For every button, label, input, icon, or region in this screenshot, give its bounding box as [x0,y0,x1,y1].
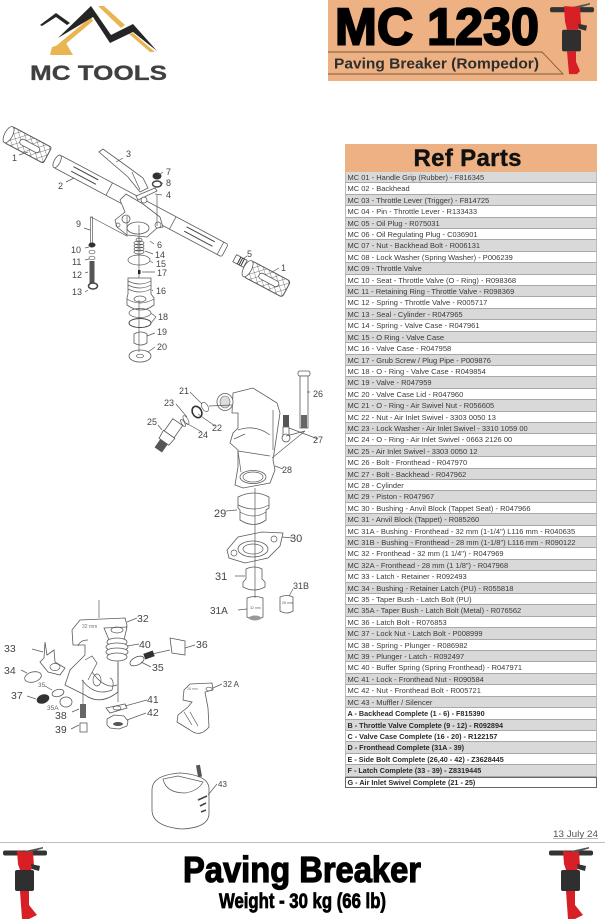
panel: ref parts table: G - Air Inlet Swivel Complete (21 - 25) [348,778,475,787]
callout numbers: 30 [290,533,302,545]
panel: ref parts table: B - Throttle Valve Complete (9 - 12) - R092894 [348,720,503,730]
part: handle tube [51,154,228,257]
part: muffler 43 [152,765,209,829]
panel: ref parts table: MC 17 - Grub Screw / Plug Pipe - P009876 [348,356,491,364]
callout numbers: 21 [179,386,189,396]
callout numbers: 7 [166,167,171,177]
part: nut 7 [152,172,162,180]
part: lock 41 [106,704,127,713]
callout numbers: 36 [196,639,208,651]
panel: ref parts table: MC 18 - O - Ring - Valve Case - R049854 [348,367,486,376]
callout numbers: 12 [72,270,82,280]
panel: ref parts table: MC 26 - Bolt - Fronthead - R047970 [348,458,467,467]
panel: ref parts table: MC 03 - Throttle Lever (Trigger) - F814725 [348,196,489,205]
callout numbers: 2 [58,181,63,191]
part: fronthead 32A: 28 mm [187,687,198,691]
panel: ref parts table: MC 08 - Lock Washer (Spring Washer) - P006239 [348,253,513,262]
part: valve case lid 20 [129,350,151,362]
callout numbers: 3 [126,149,131,159]
panel: ref parts table: MC 07 - Nut - Backhead Bolt - R006131 [348,241,480,250]
callout numbers: 5 [247,249,252,259]
panel: ref parts table: MC 31A - Bushing - Fronthead - 32 mm (1-1/4") L116 mm - R040635 [348,527,575,536]
part: o rings 18 [129,308,151,318]
callout numbers: 23 [164,398,174,408]
panel: ref parts table: MC 15 - O Ring - Valve Case [348,333,444,342]
part: latch bolt 36 [143,638,185,660]
panel: ref parts table: MC 22 - Nut - Air Inlet Swivel - 3303 0050 13 [348,413,496,422]
panel: ref parts table: MC 02 - Backhead [348,184,410,193]
callout numbers: 32 [137,613,149,625]
panel: ref parts table: MC 43 - Muffler / Silencer [348,698,432,707]
callout numbers: 13 [72,287,82,297]
panel: ref parts table: MC 13 - Seal - Cylinder - R047965 [348,310,463,319]
panel: model title banner [328,0,597,81]
callout numbers: 29 [214,508,226,520]
callout numbers: 38 [55,710,67,722]
panel: ref parts table: MC 09 - Throttle Valve [348,264,422,273]
panel: ref parts table: MC 31B - Bushing - Fronthead - 28 mm (1-1/8") L116 mm - R090122 [348,538,576,547]
part: bolt 26 [298,371,310,428]
part: small taper bush 35 [51,688,65,698]
icon: gold excavator arm [50,6,155,55]
panel: ref parts table: D - Fronthead Complete (31A - 39) [348,743,464,752]
part: bolt 27 [282,415,290,442]
part: right handle grip [240,259,291,297]
callout numbers: 25 [147,417,157,427]
panel: ref parts table: MC 36 - Latch Bolt - R076853 [348,618,447,627]
part: bushing 31B [280,596,293,613]
part: nut 42 [107,715,128,729]
leader lines [19,152,318,795]
panel: ref parts table: MC 05 - Oil Plug - R075031 [348,219,440,228]
panel: ref parts table: MC 21 - O - Ring - Air Swivel Nut - R056605 [348,401,494,410]
logo wordmark: MC TOOLS [30,62,167,85]
part: nut 22 [190,405,204,419]
callout numbers: 31B [293,581,309,591]
callout numbers [4,149,323,789]
part: latch 33 [40,642,65,675]
callout numbers: 18 [158,312,168,322]
table heading: Ref Parts [413,145,521,172]
panel: ref parts table [345,144,597,788]
icon: black mountains [40,6,157,51]
callout numbers: 8 [166,178,171,188]
panel: ref parts table: MC 24 - O - Ring - Air Inlet Swivel - 0663 2126 00 [348,435,512,444]
icon: right paving breaker [549,847,593,919]
callout numbers: 4 [166,190,171,200]
panel: ref parts table: MC 33 - Latch - Retainer - R092493 [348,572,467,581]
part: spring 40 [106,638,128,661]
panel: ref parts table: MC 32 - Fronthead - 32 mm (1 1/4") - R047969 [348,549,504,558]
group: cylinder parts [153,371,310,620]
callout numbers: 31A [210,606,228,617]
panel: ref parts table: MC 04 - Pin - Throttle Lever - R133433 [348,207,477,216]
part: taper bush 35A [60,697,72,707]
part: oil plug 5 [233,255,247,267]
panel: ref parts table: MC 31 - Anvil Block (Tappet) - R085260 [348,515,479,524]
panel: ref parts table: MC 10 - Seat - Throttle Valve (O - Ring) - R098368 [348,276,516,285]
callout numbers: 35 [38,682,46,689]
part: anvil block 31 [243,567,265,590]
callout numbers: 33 [4,643,16,655]
callout numbers: 11 [72,257,81,267]
part: o ring 15 [128,255,150,265]
callout numbers: 1 [12,153,17,163]
footer title: Paving Breaker [183,849,421,890]
part: valve case 16 [127,278,154,310]
icon: paving breaker [550,3,594,74]
part: grub screw 17 [138,270,140,274]
part: fronthead flange 30 [227,532,283,563]
panel: ref parts table: MC 40 - Buffer Spring (Spring Fronthead) - R047971 [348,663,522,672]
callout numbers: 9 [76,219,81,229]
diagram: exploded parts view [1,125,323,829]
subtitle: Paving Breaker (Rompedor) [334,56,539,72]
part: fronthead body [65,618,127,700]
panel: ref parts table: MC 35 - Taper Bush - Latch Bolt (PU) [348,595,472,604]
callout numbers: 27 [313,435,323,445]
group: backhead and valve parts [1,125,291,362]
panel: ref parts table: MC 01 - Handle Grip (Rubber) - F816345 [348,173,484,182]
callout numbers: 24 [198,430,208,440]
panel: ref parts table: MC 19 - Valve - R047959 [348,378,432,387]
date stamp: 13 July 24 [553,829,598,839]
icon: left paving breaker [3,847,47,919]
logo: MC Tools [30,6,167,85]
model number: MC 1230 [335,0,539,56]
callout numbers: 19 [157,327,167,337]
part: throttle lever [99,149,148,192]
panel: ref parts table: MC 42 - Nut - Fronthead Bolt - R005721 [348,686,481,695]
panel: ref parts table: MC 34 - Bushing - Retainer Latch (PU) - R055818 [348,584,513,593]
group: fronthead and latch parts [23,600,213,829]
panel: ref parts table: A - Backhead Complete (1 - 6) - F815390 [348,709,485,718]
callout numbers: 26 [313,389,323,399]
callout numbers: 28 [282,465,292,475]
part: lock nut 37 [35,693,51,705]
panel: ref parts table: F - Latch Complete (33 - 39) - Z8319445 [348,766,481,775]
callout numbers: 16 [156,286,166,296]
part: valve 19 [134,332,147,345]
part: fronthead 32A [177,683,213,733]
callout numbers: 35A [47,705,59,712]
callout numbers: 41 [147,694,159,706]
part: cylinder 28 [230,388,280,488]
part: spring 38 [80,704,86,718]
part: piston 29 [238,493,269,524]
panel: ref parts table: MC 14 - Spring - Valve Case - R047961 [348,321,480,330]
callout numbers: 32 A [223,680,240,689]
part: bushing 31A: 32 mm [250,606,261,610]
part: pin [136,188,157,200]
part: bushing 31A [247,596,263,620]
part: washer and ring 23 24 [180,415,190,427]
panel: ref parts table: C - Valve Case Complete (16 - 20) - R122157 [348,732,497,741]
part: taper bush 35 [129,654,145,668]
callout numbers: 35 [152,662,164,674]
part: throttle valve stack [88,217,98,289]
panel: ref parts table: MC 20 - Valve Case Lid - R047960 [348,390,463,399]
panel: ref parts table: MC 25 - Air Inlet Swivel - 3303 0050 12 [348,447,478,456]
callout numbers: 14 [155,250,165,260]
panel: ref parts table: MC 06 - Oil Regulating Plug - C036901 [348,230,478,239]
part: left handle grip [1,125,52,163]
callout numbers: 43 [218,780,227,789]
panel: ref parts table: MC 38 - Spring - Plunger - R086982 [348,641,468,650]
panel: ref parts table: MC 28 - Cylinder [348,481,404,490]
panel: ref parts table: MC 37 - Lock Nut - Latch Bolt - P008999 [348,629,483,638]
callout numbers: 17 [157,268,167,278]
callout numbers: 34 [4,665,16,677]
callout numbers: 1 [281,263,286,273]
callout numbers: 6 [157,240,162,250]
part: bushing 34 [23,670,43,684]
callout numbers: 37 [11,690,23,702]
panel: ref parts table: MC 32A - Fronthead - 28 mm (1 1/8") - R047968 [348,561,508,570]
part: washer 8 [152,181,162,187]
callout numbers: 20 [157,342,167,352]
part: bushing 31B: 28 mm [282,601,293,605]
table heading [344,144,597,172]
panel: ref parts table: E - Side Bolt Complete (26,40 - 42) - Z3628445 [348,755,504,764]
callout numbers: 42 [147,707,159,719]
part: spring 14 [134,238,144,254]
group: fronthead and latch parts: 32 mm [82,624,97,630]
panel: ref parts table: MC 30 - Bushing - Anvil Block (Tappet Seat) - R047966 [348,504,531,513]
part: backhead block [115,194,163,237]
callout numbers: 22 [212,423,222,433]
panel: ref parts table: MC 35A - Taper Bush - Latch Bolt (Metal) - R076562 [348,606,521,615]
panel: ref parts table: MC 11 - Retaining Ring - Throttle Valve - R098369 [348,287,514,296]
callout numbers: 10 [71,245,81,255]
part: air inlet swivel 25 [153,418,183,454]
footer weight: Weight - 30 kg (66 lb) [219,890,386,913]
panel: ref parts table: MC 23 - Lock Washer - Air Inlet Swivel - 3310 1059 00 [348,424,528,433]
part: o ring 21 [200,401,210,413]
panel: ref parts table: MC 41 - Lock - Fronthead Nut - R090584 [348,675,484,684]
panel: ref parts table: MC 16 - Valve Case - R047958 [348,344,451,353]
callout numbers: 15 [156,259,166,269]
panel: ref parts table: MC 39 - Plunger - Latch - R092497 [348,652,464,661]
callout numbers: 39 [55,724,67,736]
panel: ref parts table: MC 27 - Bolt - Backhead - R047962 [348,470,466,479]
panel: ref parts table: MC 12 - Spring - Throttle Valve - R005717 [348,298,487,307]
callout numbers: 31 [215,571,227,583]
callout numbers: 40 [139,639,151,651]
panel: ref parts table: MC 29 - Piston - R047967 [348,492,434,501]
part: plunger 39 [80,723,87,732]
